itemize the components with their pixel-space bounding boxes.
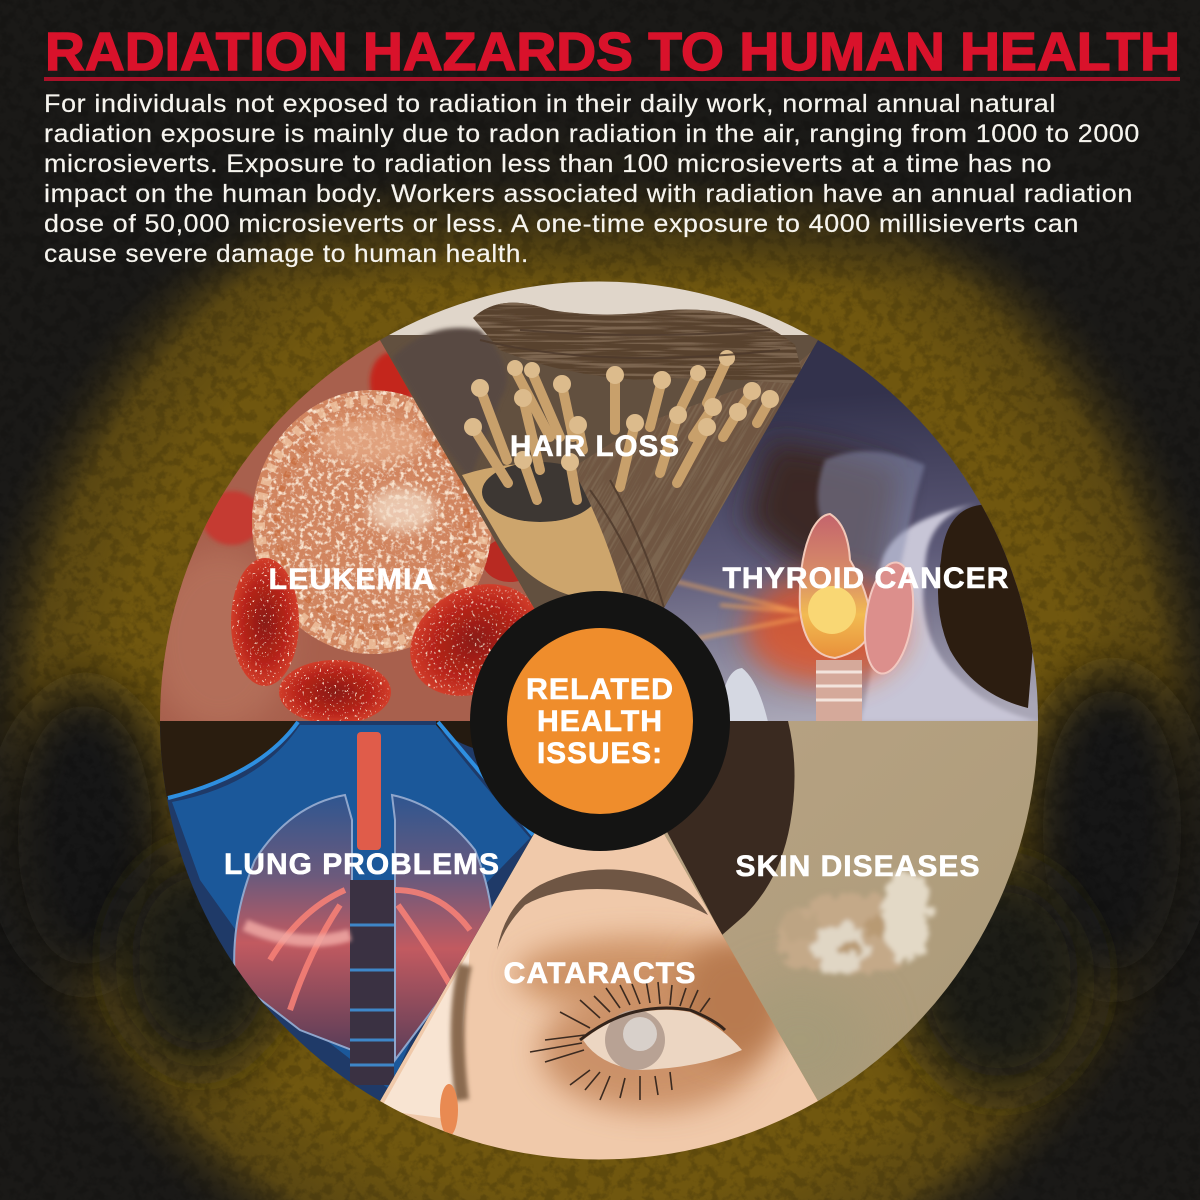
thyroid left lobe [800,514,872,658]
label: cataracts: CATARACTS [504,957,696,990]
right lung [392,795,492,1060]
intro text: cause severe damage to human health. [44,240,529,268]
top hair mass [473,303,805,385]
intro text: dose of 50,000 microsieverts or less. A one-time exposure to 4000 millisieverts can [44,210,1079,238]
left lung [234,795,352,1050]
intro text: impact on the human body. Workers associated with radiation have an annual radiation [44,180,1133,208]
intro text: microsieverts. Exposure to radiation less than 100 microsieverts at a time has no [44,150,1052,178]
center badge: ISSUES: [537,737,663,770]
label: lung problems: LUNG PROBLEMS [224,848,500,881]
trachea [816,660,862,722]
label: thyroid cancer: THYROID CANCER [722,562,1010,595]
spine [350,880,394,1085]
title: RADIATION HAZARDS TO HUMAN HEALTH [45,22,1180,82]
wheel of health issues [150,241,1050,1165]
shoulder [720,668,768,722]
shoulders glow [168,722,298,798]
tumor [808,586,856,634]
center badge [470,591,730,851]
eyebrow [497,869,708,950]
fallen hair [576,352,811,607]
brush pad [482,462,598,522]
larynx [818,451,925,600]
panel: thyroid cancer [664,340,1038,721]
center badge: RELATED [526,673,674,706]
intro text [44,90,1140,268]
brush body [462,464,623,595]
intro text: For individuals not exposed to radiation in their daily work, normal annual natural [44,90,1056,118]
vessels [270,890,470,1010]
label: hair loss: HAIR LOSS [510,430,680,463]
label: leukemia: LEUKEMIA [268,563,436,596]
dark corner [150,715,300,810]
hair strands [480,330,780,640]
panel: lung problems [150,710,610,1120]
panel: skin diseases [600,710,1050,1110]
panel: hair loss [380,282,818,608]
panel: leukemia [160,340,534,721]
dark background shape [938,504,1032,708]
trachea [357,732,381,850]
panel: cataracts [370,830,830,1165]
brush pins [464,350,779,500]
ear [440,1084,458,1136]
glow [745,575,905,685]
label: skin diseases: SKIN DISEASES [736,850,980,883]
hair on left [392,328,507,480]
hair wisp [458,965,465,1100]
center badge: HEALTH [537,705,663,738]
eye [530,980,742,1100]
intro text: radiation exposure is mainly due to radon radiation in the air, ranging from 1000 to 2000 [44,120,1140,148]
thyroid right lobe [864,562,914,674]
neck highlight [860,502,1040,722]
